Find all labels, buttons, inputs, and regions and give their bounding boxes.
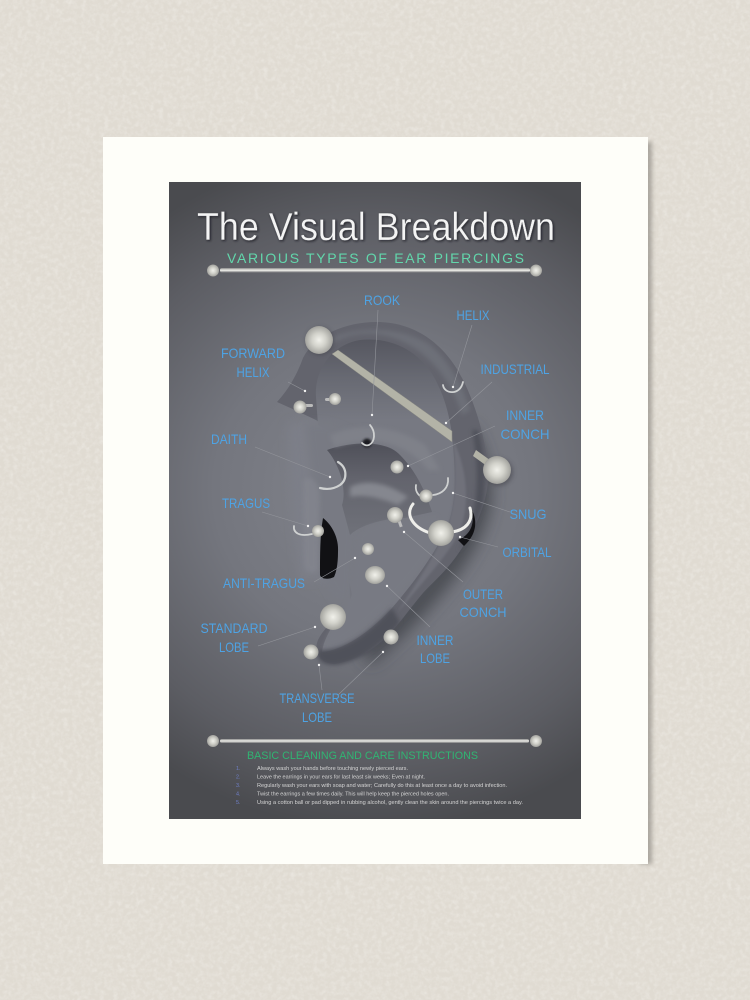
- care instructions list: 4.: [236, 792, 240, 798]
- care instructions list: [236, 766, 523, 806]
- orbital ring and ball: [410, 504, 471, 546]
- label: inner lobe: LOBE: [420, 650, 450, 666]
- bottom barbell divider: [207, 735, 542, 747]
- transverse lobe studs: [304, 630, 398, 660]
- care instructions list: Always wash your hands before touching newly pierced ears.: [257, 766, 408, 772]
- helix ring: [443, 382, 463, 392]
- ear illustration: [277, 322, 513, 665]
- label: transverse lobe: LOBE: [302, 709, 332, 725]
- outer ear helix and rim: [277, 322, 488, 664]
- label: transverse lobe: [280, 690, 354, 725]
- label: outer conch: CONCH: [460, 604, 506, 620]
- label: forward helix: [221, 345, 285, 380]
- lower antihelix plane: [323, 516, 443, 650]
- tragus column: [303, 478, 320, 572]
- rim outer shade: [458, 430, 485, 552]
- label: orbital: ORBITAL: [502, 544, 552, 560]
- label: standard lobe: STANDARD: [200, 620, 268, 636]
- label: helix: HELIX: [456, 307, 490, 323]
- label: industrial: INDUSTRIAL: [480, 361, 550, 377]
- face light region: [288, 422, 350, 580]
- label: forward helix: FORWARD: [221, 345, 285, 361]
- rook ring: [362, 425, 374, 445]
- mat shadow: [640, 142, 652, 864]
- helix lighter rim: [320, 330, 470, 415]
- label: rook: ROOK: [364, 292, 401, 308]
- white mat: [103, 137, 648, 864]
- snug ring and ball: [416, 478, 448, 502]
- industrial barbell: [305, 326, 513, 486]
- top barbell divider: [207, 264, 542, 276]
- lobe bottom shade: [318, 608, 400, 665]
- label: daith: DAITH: [211, 431, 247, 447]
- right rim mid band: [398, 440, 466, 612]
- anti-tragus stud: [362, 543, 374, 555]
- label: outer conch: OUTER: [463, 586, 503, 602]
- forward helix studs: [294, 393, 341, 414]
- poster: [169, 182, 581, 819]
- dark notch behind orbital: [458, 510, 475, 546]
- ear canal: [320, 518, 338, 579]
- antihelix highlight: [330, 427, 440, 470]
- care instructions list: Regularly wash your ears with soap and water; Carefully do this at least once a day to avoid infection.: [257, 783, 507, 789]
- leader lines and anchor dots: [255, 310, 510, 695]
- care instructions list: 2.: [236, 774, 240, 780]
- label: standard lobe: LOBE: [219, 639, 249, 655]
- outer conch stud: [387, 507, 403, 527]
- inner ear plane: [316, 339, 455, 652]
- concha highlight: [350, 483, 408, 505]
- care instructions list: Using a cotton ball or pad dipped in rubbing alcohol, gently clean the skin around the piercings twice a day.: [257, 800, 523, 806]
- label: snug: SNUG: [510, 506, 546, 522]
- label: inner conch: INNER: [506, 407, 544, 423]
- standard lobe stud: [320, 604, 346, 630]
- care instructions list: 1.: [236, 766, 240, 772]
- label: transverse lobe: TRANSVERSE: [280, 690, 354, 706]
- label: inner conch: [500, 407, 550, 442]
- inner conch stud: [390, 460, 404, 474]
- care instructions list: 3.: [236, 783, 240, 789]
- care instructions list: 5.: [236, 800, 240, 806]
- label: anti-tragus: ANTI-TRAGUS: [223, 575, 305, 591]
- label: tragus: TRAGUS: [222, 495, 270, 511]
- rook shadow: [362, 438, 372, 448]
- label: inner lobe: INNER: [416, 632, 454, 648]
- tragus ring and ball: [294, 525, 324, 537]
- label: standard lobe: [200, 620, 268, 655]
- label: inner conch: CONCH: [500, 426, 550, 442]
- label: inner lobe: [416, 632, 454, 666]
- care instructions list: Leave the earrings in your ears for last least six weeks; Even at night.: [257, 774, 425, 780]
- subtitle: VARIOUS TYPES OF EAR PIERCINGS: [227, 250, 524, 266]
- concha: [327, 444, 432, 535]
- inner lobe stud: [365, 566, 385, 584]
- title: The Visual Breakdown: [197, 206, 555, 249]
- care instructions list: Twist the earrings a few times daily. This will help keep the pierced holes open.: [257, 792, 449, 798]
- daith ring: [320, 462, 345, 489]
- label: outer conch: [460, 586, 506, 620]
- ear cast shadow: [360, 420, 492, 665]
- care heading: BASIC CLEANING AND CARE INSTRUCTIONS: [247, 750, 478, 762]
- crus soft blend: [305, 423, 360, 600]
- label: forward helix: HELIX: [236, 364, 270, 380]
